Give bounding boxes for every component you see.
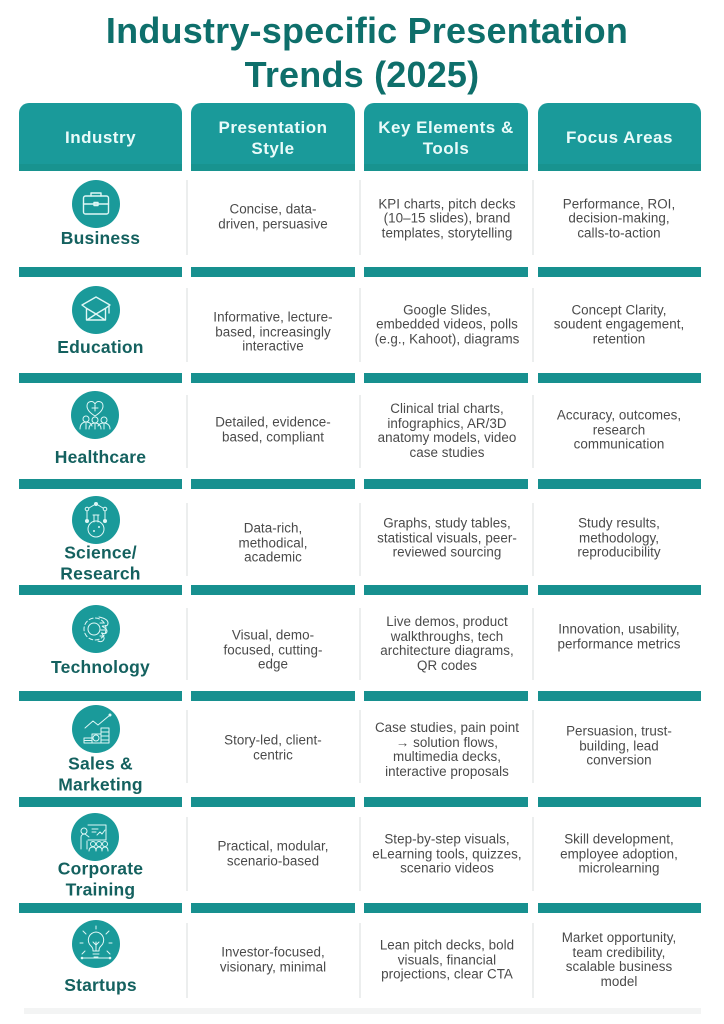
text: Startups tools [362, 938, 532, 982]
text: Startups style: visionary, minimal [220, 959, 326, 974]
text: Science tools: reviewed sourcing [393, 544, 501, 559]
text: Technology focus: performance metrics [558, 636, 680, 651]
text: Sales tools: interactive proposals [385, 764, 509, 778]
text: Startups tools: visuals, financial [398, 952, 496, 967]
text: Sales focus: conversion [586, 752, 652, 767]
title: Trends (2025) [245, 54, 479, 95]
text: Science tools: statistical visuals, peer- [377, 530, 517, 545]
label: Science/Research [60, 542, 141, 583]
text: Science focus: Study results, [578, 515, 660, 530]
text: Science tools: Graphs, study tables, [383, 515, 511, 530]
text: Technology tools: Live demos, product [386, 614, 508, 629]
text: Sales tools: Case studies, pain point [375, 720, 519, 735]
label: Education: Education [57, 337, 144, 357]
text: Healthcare focus: research [593, 422, 645, 437]
text: Startups tools: projections, clear CTA [381, 966, 513, 981]
label: Startups: Startups [64, 975, 137, 995]
text: Corporate focus [560, 831, 678, 876]
text: Corporate tools [372, 831, 522, 875]
text: Corporate tools: Step-by-step visuals, [384, 831, 510, 846]
text: Startups focus: model [601, 974, 637, 988]
label: Sales & Marketing: Marketing [58, 774, 143, 794]
text: Startups focus: team credibility, [573, 944, 665, 960]
text: Education focus: Concept Clarity, [571, 302, 667, 317]
label: Corporate Training: Corporate [58, 858, 143, 878]
text: Corporate focus: employee adoption, [560, 846, 678, 861]
header: Focus Areas [538, 103, 701, 171]
label: Business: Business [61, 228, 140, 248]
label: Corporate Training [58, 858, 143, 899]
text: Science style: Data-rich, [244, 520, 302, 535]
text: Technology style: edge [258, 656, 288, 671]
title [106, 10, 628, 95]
text: Education style: based, increasingly [215, 324, 331, 339]
text: Corporate tools: scenario videos [400, 860, 494, 875]
icon: flask network [72, 496, 120, 544]
text: Business focus [563, 196, 675, 240]
bottom shadow strip [24, 1008, 701, 1014]
header: Presentation Style: Style [251, 138, 295, 158]
text: Business tools: KPI charts, pitch decks [378, 196, 516, 211]
text: Business style: Concise, data- [229, 202, 317, 216]
text: Sales style [224, 732, 322, 762]
row: Technology [51, 605, 680, 677]
text: Business focus: Performance, ROI, [563, 196, 675, 211]
text: Education tools [375, 302, 519, 346]
text: Science focus: reproducibility [577, 544, 661, 559]
text: Business tools: templates, storytelling [382, 225, 512, 240]
icon: gear and circuit [72, 605, 120, 653]
text: Startups style: Investor-focused, [221, 944, 325, 960]
text: Startups style [188, 946, 358, 974]
title: Industry-specific Presentation [106, 10, 628, 51]
header: Focus Areas: Focus Areas [566, 128, 673, 147]
row: Startups [64, 920, 676, 995]
text: Business tools: (10–15 slides), brand [384, 210, 510, 225]
text: Healthcare tools: case studies [409, 444, 485, 460]
icon: graduation cap [72, 286, 120, 334]
text: Business style: driven, persuasive [218, 216, 328, 231]
text: Technology tools [380, 614, 514, 672]
text: Education focus: soudent engagement, [554, 316, 684, 331]
text: Technology tools: walkthroughs, tech [391, 628, 503, 644]
text: Corporate style: Practical, modular, [217, 838, 329, 854]
text: Startups focus [534, 931, 704, 989]
text: Startups focus: scalable business [566, 959, 672, 974]
icon: briefcase [72, 180, 120, 228]
label: Science/Research: Research [60, 563, 141, 583]
header: Industry: Industry [65, 128, 136, 147]
label: Sales & Marketing [58, 754, 143, 794]
text: Sales style: centric [253, 747, 293, 762]
text: Education style [213, 309, 333, 353]
text: Healthcare style: based, compliant [222, 429, 324, 444]
text: Sales focus [566, 723, 672, 767]
text: Education tools: embedded videos, polls [376, 316, 518, 331]
text: Education tools: (e.g., Kahoot), diagrams [375, 331, 519, 346]
text: Education tools: Google Slides, [403, 302, 491, 317]
text: Startups tools: Lean pitch decks, bold [380, 937, 514, 952]
text: Sales style: Story-led, client- [224, 732, 322, 748]
text: Science focus [577, 515, 661, 560]
row: Corporate Training [58, 813, 678, 899]
text: Technology focus: Innovation, usability, [558, 622, 680, 636]
text: Science tools [377, 515, 517, 560]
text: Corporate style: scenario-based [227, 853, 319, 868]
text: Healthcare style [215, 414, 331, 444]
text: Education style: Informative, lecture- [213, 309, 333, 324]
icon: light bulb [72, 920, 120, 968]
row: Sales & Marketing [58, 705, 672, 794]
text: Corporate style [217, 838, 329, 868]
text: Education focus [554, 302, 684, 346]
text: Technology style: Visual, demo- [232, 627, 314, 642]
text: Science style: academic [244, 549, 302, 564]
text: Science style: methodical, [238, 535, 308, 550]
label: Science/Research: Science/ [64, 542, 137, 562]
label: Sales & Marketing: Sales & [68, 754, 133, 774]
text: Technology style [223, 627, 323, 672]
text: Education focus: retention [593, 331, 645, 346]
text: Education style: interactive [242, 338, 304, 353]
header: Presentation Style: Presentation [218, 118, 327, 136]
text: Technology focus [558, 622, 680, 652]
text: Corporate focus: Skill development, [564, 831, 674, 846]
row: Science/Research [60, 496, 661, 583]
header: Industry [19, 103, 182, 171]
icon: healthcare team [71, 391, 119, 439]
header: Presentation Style [191, 103, 355, 171]
text: Science style [238, 520, 308, 564]
icon: presenter and audience [71, 813, 119, 861]
text: Healthcare tools: Clinical trial charts, [390, 401, 504, 416]
text: Sales tools [375, 720, 519, 779]
text: Technology style: focused, cutting- [223, 642, 323, 657]
text: Healthcare tools: anatomy models, video [378, 430, 516, 445]
text: Sales focus: Persuasion, trust- [566, 723, 672, 738]
text: Technology tools: architecture diagrams, [380, 643, 514, 658]
label: Corporate Training: Training [66, 879, 135, 899]
text: Technology tools: QR codes [417, 658, 477, 672]
text: Corporate focus: microlearning [578, 860, 660, 875]
text: Healthcare focus: Accuracy, outcomes, [557, 407, 681, 422]
row: Business [61, 180, 675, 248]
text: Sales tools: multimedia decks, [393, 749, 501, 764]
header: Key Elements & Tools: Key Elements & [378, 118, 514, 136]
text: Healthcare focus [556, 407, 681, 451]
text: Sales tools: → solution flows, [396, 734, 498, 750]
text: Business focus: calls-to-action [577, 225, 661, 240]
row: Healthcare [55, 391, 681, 467]
text: Healthcare focus: communication [574, 436, 664, 451]
icon: growth chart [72, 705, 120, 753]
label: Healthcare: Healthcare [55, 447, 146, 467]
text: Healthcare style: Detailed, evidence- [215, 414, 331, 430]
text: Startups focus: Market opportunity, [562, 930, 676, 945]
text: Healthcare tools: infographics, AR/3D [387, 416, 507, 430]
text: Business tools [378, 196, 516, 240]
text: Healthcare tools [378, 401, 516, 460]
row: Education [57, 286, 684, 357]
text: Corporate tools: eLearning tools, quizzes, [372, 846, 522, 861]
text: Business style [218, 202, 328, 232]
header: Key Elements & Tools [364, 103, 528, 171]
label: Technology: Technology [51, 657, 150, 677]
text: Business focus: decision-making, [568, 210, 670, 225]
text: Sales focus: building, lead [579, 738, 659, 753]
text: Science focus: methodology, [579, 530, 659, 545]
header: Key Elements & Tools: Tools [423, 138, 469, 158]
